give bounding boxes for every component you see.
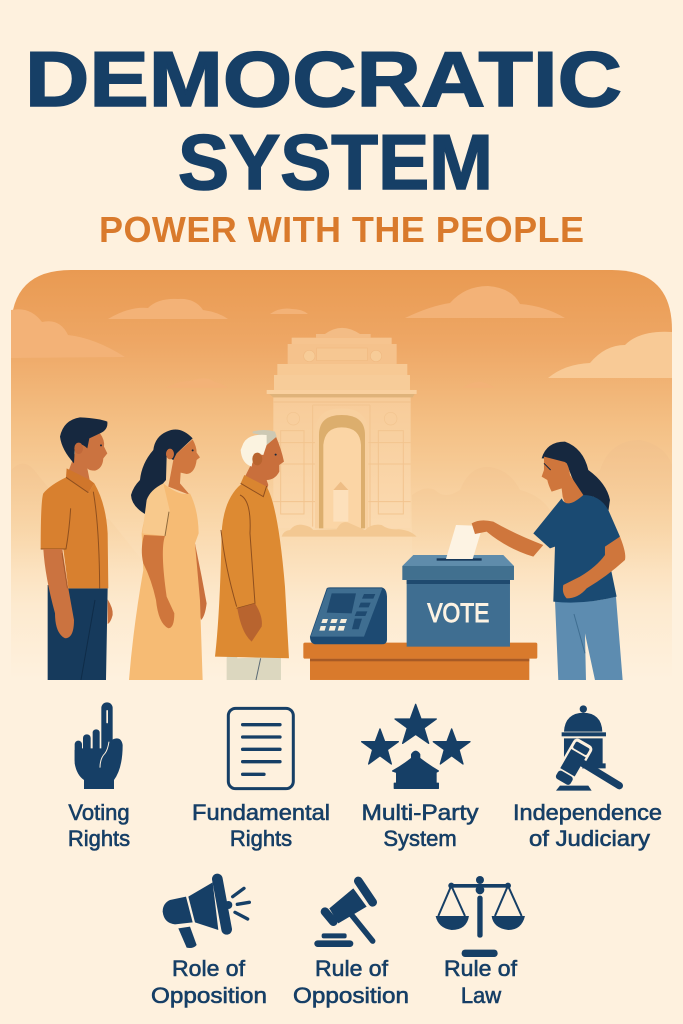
- table: [303, 643, 537, 680]
- electronic voting machine: [310, 587, 387, 644]
- background hills: [11, 440, 672, 570]
- icon: raised finger hand: [75, 702, 123, 789]
- panel sky background: [11, 270, 672, 680]
- subtitle: POWER WITH THE PEOPLE: [99, 209, 584, 250]
- ballot box: [402, 555, 514, 647]
- person: woman in peach dress: [129, 429, 207, 680]
- clouds: [11, 286, 672, 388]
- label: Voting Rights: Rights: [68, 826, 130, 851]
- title: DEMOCRATIC: [25, 35, 622, 123]
- person: man in orange shirt: [41, 417, 113, 680]
- title: [25, 35, 622, 206]
- label: Rule of Opposition: Opposition: [293, 983, 409, 1008]
- India Gate monument: [267, 328, 417, 537]
- icon: three stars over parliament: [362, 704, 470, 788]
- illustration panel: voting scene: [11, 270, 672, 680]
- icon: courthouse dome and gavel: [551, 705, 619, 791]
- label: Independence of Judiciary: Independence: [513, 800, 662, 825]
- ballot paper: [446, 525, 483, 559]
- label: Rule of Law: Rule of: [444, 956, 518, 981]
- label: Fundamental Rights: Rights: [230, 826, 292, 851]
- person: woman voting: [472, 442, 625, 680]
- label: Multi-Party System: Multi-Party: [362, 800, 478, 825]
- title: SYSTEM: [178, 118, 493, 206]
- label: Multi-Party System: System: [383, 826, 457, 851]
- label: Role of Opposition: Role of: [172, 956, 246, 981]
- label: Voting Rights: Voting: [68, 800, 130, 825]
- icon: megaphone: [163, 879, 249, 948]
- label: Independence of Judiciary: of Judiciary: [529, 826, 650, 851]
- person: elderly man in kurta: [215, 430, 289, 680]
- label: Role of Opposition: Opposition: [151, 983, 267, 1008]
- label: Rule of Opposition: Rule of: [315, 956, 389, 981]
- icon: scales of justice: [436, 876, 525, 957]
- label: Rule of Law: Law: [461, 983, 501, 1008]
- label: Fundamental Rights: Fundamental: [192, 800, 330, 825]
- icon: gavel: [314, 881, 373, 947]
- icon: document: [228, 708, 293, 789]
- ballot box: VOTE: [427, 598, 489, 628]
